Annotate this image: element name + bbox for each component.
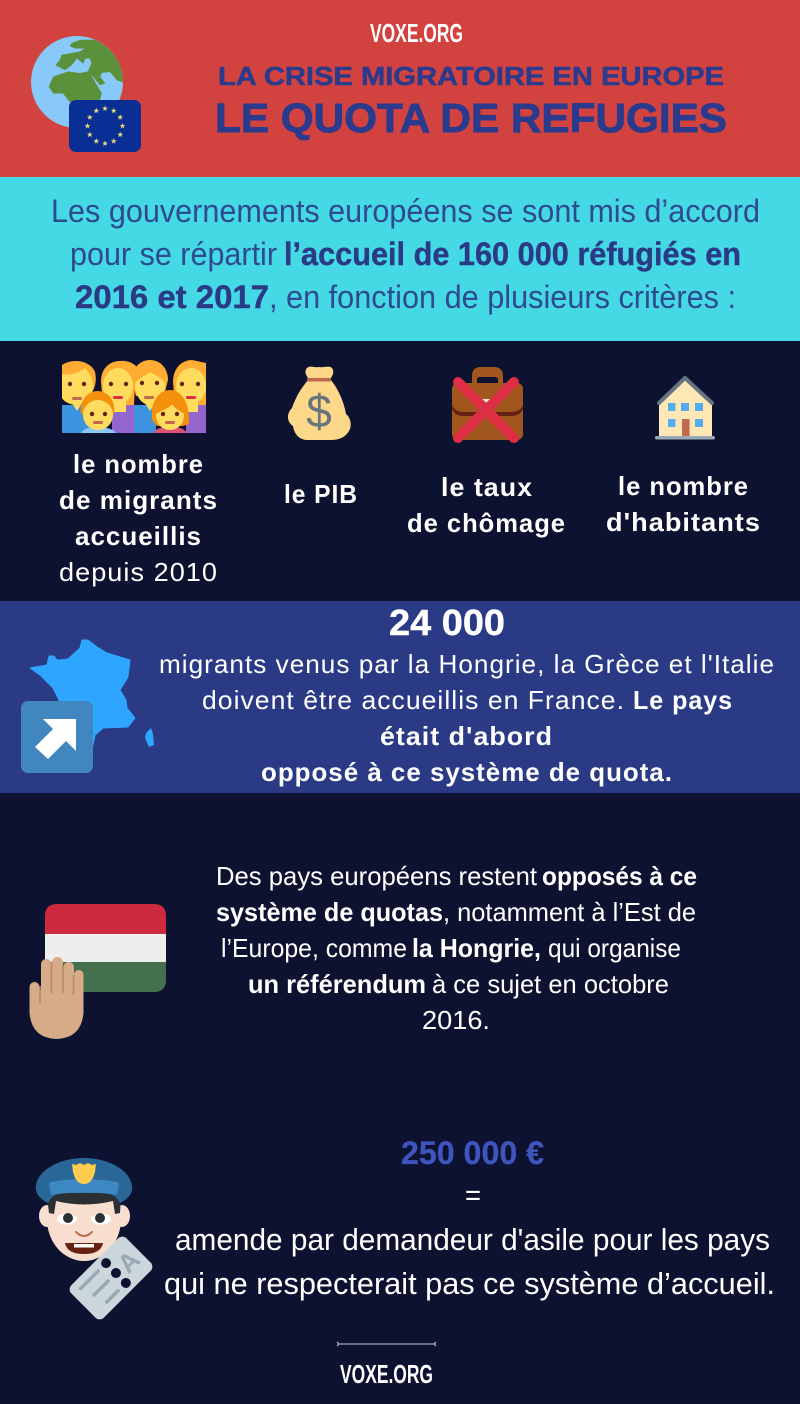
criterion label: migrants: de migrants [59,485,218,515]
Hungary text: 2016. [422,1005,490,1035]
icon: house [655,378,715,440]
icon: police officer with ticket: A [111,1244,146,1279]
France text: Le pays [633,685,733,715]
panel: header [0,0,800,177]
fine text: amende par demandeur d'asile pour les pays [175,1222,770,1257]
Hungary text: Des pays européens restent [216,861,538,891]
criterion label: chômage [407,472,566,538]
Hungary text: , notamment à l’Est de [443,897,696,927]
criterion label: chômage: le taux [441,472,533,502]
footer: VOXE.ORG [340,1359,433,1389]
criterion label: migrants: le nombre [73,449,204,479]
icon: Hungarian flag and hand [30,904,166,1039]
France text: était d'abord [380,721,553,751]
Hungary text: opposés à ce [542,861,697,891]
criterion label: PIB: le PIB [284,479,358,509]
intro text: Les gouvernements européens se sont mis d’accord [51,193,760,229]
panel: introduction [0,177,800,341]
Hungary text: qui organise [548,933,681,963]
panel: France [0,601,800,793]
Hungary text: à ce sujet en octobre [432,969,669,999]
intro text [51,193,760,315]
criterion label: migrants: depuis 2010 [59,557,218,587]
Hungary text [216,861,697,1035]
icon: crossed briefcase [452,367,523,440]
footer [337,1342,436,1389]
icon: globe with EU flag [31,36,141,152]
intro text: l’accueil de 160 000 réfugiés en [284,236,741,272]
intro text: , en fonction de plusieurs critères : [269,279,736,315]
panel: Hungary [30,861,697,1039]
criterion label: habitants [606,471,761,537]
Hungary text: système de quotas [216,897,443,927]
criterion label: migrants: accueillis [75,521,202,551]
figure: 24 000: 24 000 [389,602,505,643]
icon: families [62,360,206,433]
criterion label: migrants [59,449,218,587]
France text: migrants venus par la Hongrie, la Grèce et l'Italie [159,649,775,679]
criterion label: habitants: le nombre [618,471,749,501]
brand label: VOXE.ORG [370,18,463,48]
Hungary text: un référendum [248,969,426,999]
title: LE QUOTA DE REFUGIES [215,95,727,141]
criterion label: habitants: d'habitants [606,507,761,537]
fine text: qui ne respecterait pas ce système d’accueil. [164,1266,775,1301]
intro text: pour se répartir [70,236,277,272]
intro text: 2016 et 2017 [75,279,269,315]
panel: fine [36,1135,775,1322]
icon: police officer with ticket [36,1158,155,1322]
icon: France map with arrow [21,640,154,773]
figure: 250 000 €: 250 000 € [401,1135,544,1171]
Hungary text: la Hongrie, [412,933,541,963]
panel: criteria [59,360,761,587]
France text: opposé à ce système de quota. [261,757,673,787]
France text [159,649,775,787]
subtitle: LA CRISE MIGRATOIRE EN EUROPE [218,61,724,91]
equals sign: = [465,1180,481,1212]
France text: doivent être accueillis en France. [202,685,625,715]
icon: money bag: $ [306,385,332,437]
icon: money bag [288,367,351,440]
criterion label: chômage: de chômage [407,508,566,538]
Hungary text: l’Europe, comme [221,933,407,963]
fine text [164,1222,775,1301]
